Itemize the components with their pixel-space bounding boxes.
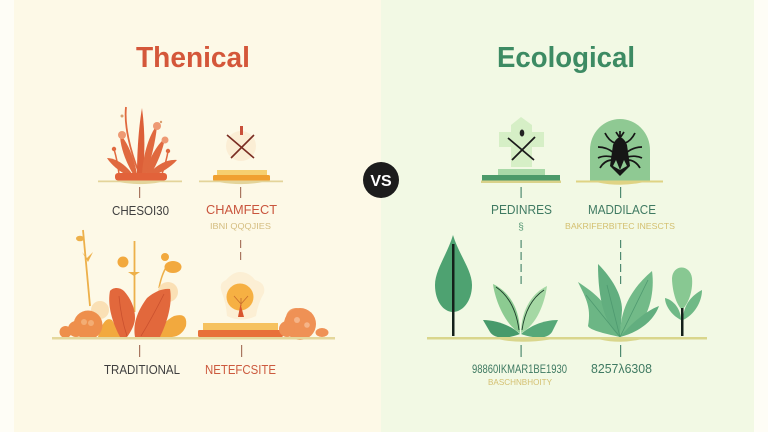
connector ticks [520, 187, 621, 357]
illustration: orange plants [60, 230, 186, 340]
label: small ecological caption: BASCHNBHOITY [488, 377, 552, 387]
connector ticks [139, 187, 242, 357]
icon: ground line 3 [481, 180, 561, 183]
icon: crossed-out green marker [482, 117, 560, 180]
illustration: seedling [483, 284, 558, 338]
icon: red weed plant [107, 107, 177, 180]
label: madilace: MADDILACE [588, 203, 656, 217]
title: chemical: Thenical [136, 42, 250, 74]
illustration: small tree [665, 268, 702, 336]
label: insects caption: BAKRIFERBITEC INESCTS [565, 221, 675, 231]
label: chamfect: CHAMFECT [206, 202, 277, 217]
badge: vs: VS [370, 173, 392, 190]
icon: long ground line right [427, 337, 707, 342]
illustration: broad leaf plant [578, 264, 659, 337]
badge: vs [363, 162, 399, 198]
icon: ground line 4 [576, 180, 663, 185]
label: section mark: § [518, 222, 524, 233]
label: netefcsite: NETEFCSITE [205, 362, 276, 377]
panel: chemical side [14, 0, 381, 432]
label: chesoi30: CHESOI30 [112, 204, 169, 218]
illustration: tall tree [435, 235, 472, 336]
title: ecological: Ecological [497, 42, 635, 74]
label: long number: 98860IKMAR1BE1930 [472, 362, 567, 376]
icon: crossed-out marker [213, 126, 270, 181]
icon: long ground line left [52, 337, 335, 340]
label: traditional: TRADITIONAL [104, 363, 180, 377]
icon: ground line 1 [98, 180, 182, 184]
panel: ecological side [381, 0, 754, 432]
label: pedinres: PEDINRES [491, 203, 552, 217]
label: number: 8257λ6308 [591, 362, 652, 376]
illustration: lit tree over plinth [198, 272, 328, 340]
label: small chamfect caption: IBNI QQQJIES [210, 221, 271, 231]
icon: insect dome [590, 119, 650, 181]
icon: ground line 2 [199, 180, 283, 184]
